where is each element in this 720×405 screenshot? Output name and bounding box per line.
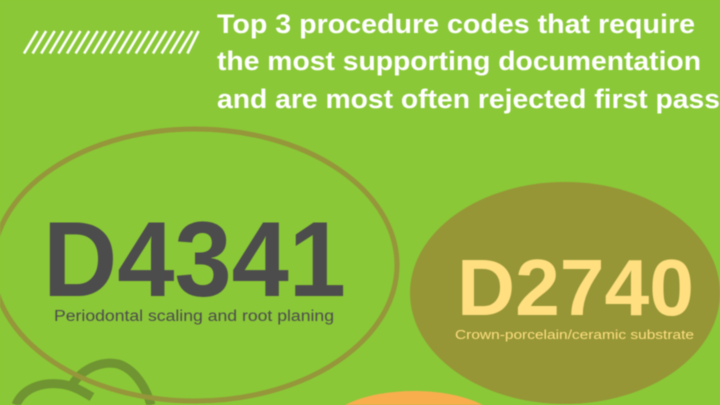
title xyxy=(217,9,720,114)
description D4341: Periodontal scaling and root planing xyxy=(54,308,334,325)
description D2740: Crown-porcelain/ceramic substrate xyxy=(455,327,694,342)
icon: tooth outline xyxy=(16,363,151,405)
title: Top 3 procedure codes that require xyxy=(217,9,695,39)
panel: third code orange ellipse xyxy=(345,391,483,405)
decorative hatch bar xyxy=(24,31,198,54)
code D4341: D4341 xyxy=(43,199,346,319)
panel: D2740 filled ellipse xyxy=(410,182,720,404)
title: and are most often rejected first pass xyxy=(217,84,720,114)
code D2740: D2740 xyxy=(457,243,694,332)
title: the most supporting documentation xyxy=(217,46,701,76)
panel: D4341 outlined ellipse xyxy=(0,129,397,401)
